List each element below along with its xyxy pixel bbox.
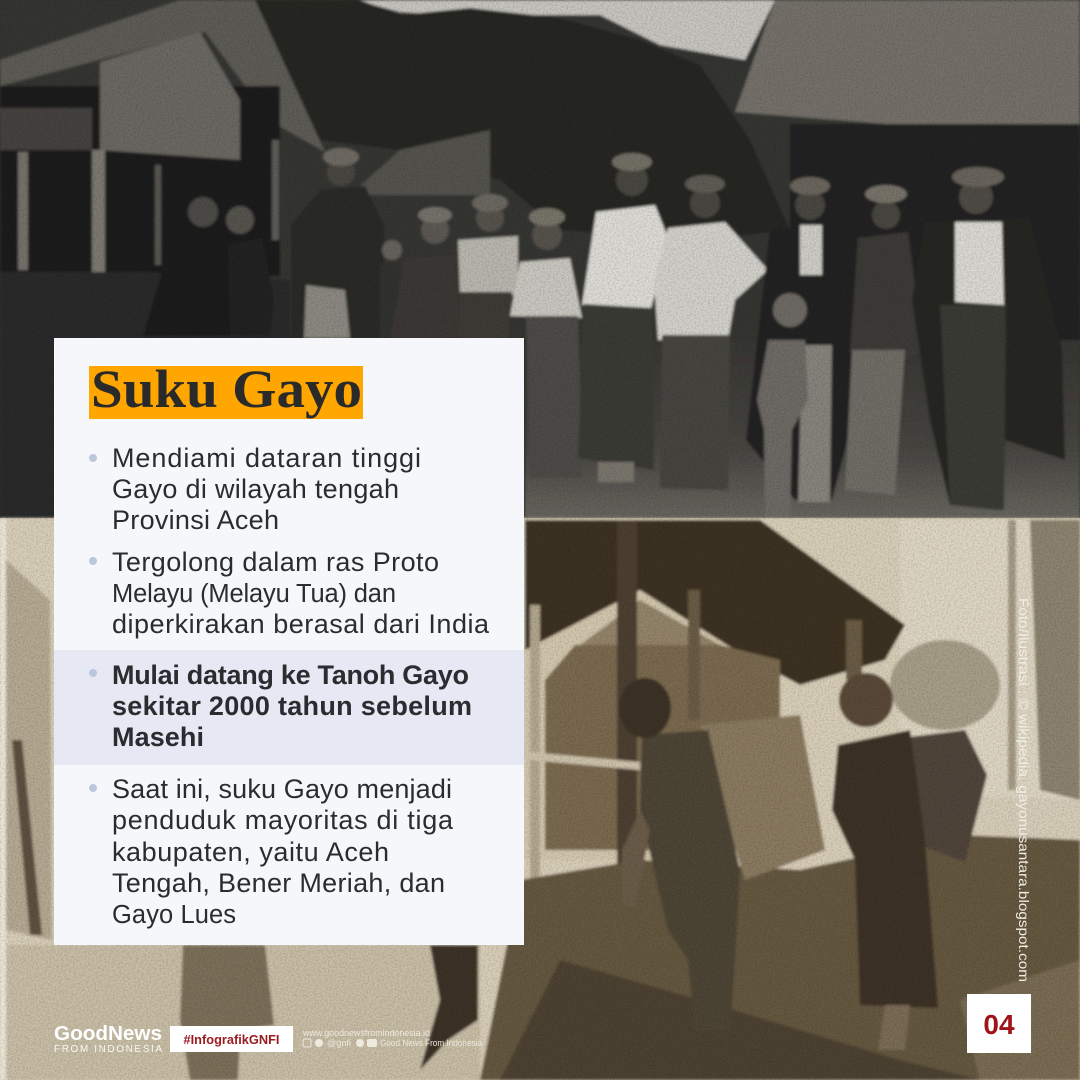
highlighted row band <box>54 650 524 765</box>
social and website info: Good News From Indonesia <box>380 1038 482 1048</box>
figure: man in pale shirt <box>654 175 768 490</box>
social and website info: @gnfi <box>327 1038 351 1048</box>
bullet 1: Gayo di wilayah tengah <box>112 474 399 504</box>
logo: GoodNews From Indonesia: FROM INDONESIA <box>54 1044 162 1055</box>
page number <box>967 994 1031 1053</box>
figure: man in white shirt <box>578 153 669 482</box>
porter with sack <box>832 673 987 1050</box>
title: Suku Gayo: Suku Gayo <box>91 359 362 419</box>
bullet 4: Gayo Lues <box>112 901 236 929</box>
bullet 2 <box>89 547 490 639</box>
bullet 4 <box>89 774 454 929</box>
bullet 3: highlighted <box>89 660 472 752</box>
bullet 1: Provinsi Aceh <box>112 505 279 535</box>
bullet 1 <box>89 443 421 535</box>
bullet 2: diperkirakan berasal dari India <box>112 609 490 639</box>
naked child <box>757 293 808 518</box>
bullet 4: Tengah, Bener Meriah, dan <box>112 868 445 898</box>
figure: cloaked man <box>746 177 862 502</box>
photo: Gayo villagers carrying loads in the forest <box>0 518 1080 1080</box>
bullet 4: penduduk mayoritas di tiga <box>112 805 454 835</box>
logo: GoodNews From Indonesia <box>54 1023 162 1055</box>
bullet 3: highlighted: sekitar 2000 tahun sebelum <box>112 691 472 721</box>
hashtag label <box>170 1026 293 1052</box>
figure 3 <box>291 148 384 338</box>
figure 2 <box>226 206 274 336</box>
bullet 3: highlighted: Masehi <box>112 722 204 752</box>
bullet 2: Melayu (Melayu Tua) dan <box>112 580 396 608</box>
logo: GoodNews From Indonesia: GoodNews <box>54 1023 162 1045</box>
porter with firewood <box>619 678 825 1030</box>
bullet 1: Mendiami dataran tinggi <box>112 443 421 473</box>
bullet 4: Saat ini, suku Gayo menjadi <box>112 774 452 804</box>
content panel <box>54 338 524 945</box>
hashtag label: #InfografikGNFI <box>184 1032 280 1047</box>
social and website info: www.goodnewsfromindonesia.id <box>302 1028 430 1038</box>
bullet 4: kabupaten, yaitu Aceh <box>112 837 389 867</box>
figure 1 <box>143 197 242 336</box>
lower legs behind panel <box>180 945 478 1080</box>
social icons <box>303 1039 377 1047</box>
page number: 04 <box>983 1009 1015 1040</box>
photo credit: Foto/Ilustrasi : © wikipedia, gayonusantara.blogspot.com <box>1016 598 1032 982</box>
figure: tall man with cloak <box>912 167 1065 510</box>
bullet 3: highlighted: Mulai datang ke Tanoh Gayo <box>112 660 469 690</box>
bullet 2: Tergolong dalam ras Proto <box>112 547 439 577</box>
figure: girl in blouse <box>510 208 582 478</box>
figure: woman in plaid <box>845 185 924 495</box>
social and website info <box>302 1028 482 1048</box>
children group <box>380 194 518 338</box>
photo: Gayo villagers in front of thatched houses <box>0 0 1080 518</box>
